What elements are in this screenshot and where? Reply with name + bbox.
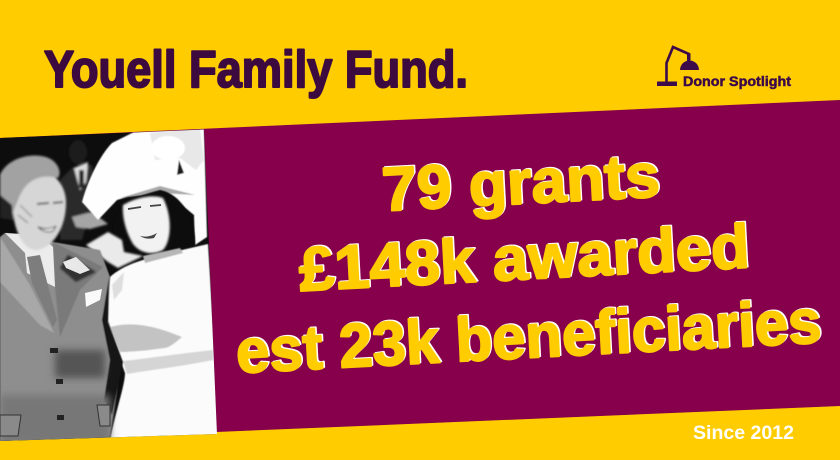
icon: desk lamp	[657, 47, 699, 86]
man's suit	[0, 233, 123, 445]
stat: beneficiaries: est 23k beneficiaries	[236, 286, 824, 386]
logo: donor spotlight	[657, 47, 791, 89]
woman's face	[123, 196, 170, 253]
logo text: Donor Spotlight	[683, 73, 791, 89]
key statistics	[234, 140, 824, 387]
woman's hair	[139, 189, 196, 246]
white hat	[82, 128, 207, 245]
stat: awarded: £148k awarded	[297, 212, 751, 305]
background guest	[60, 140, 108, 240]
man's head	[0, 156, 66, 250]
boutonniere and pocket square	[0, 255, 110, 436]
stat: grants: 79 grants	[382, 140, 663, 224]
bouquet	[86, 232, 143, 268]
stat: beneficiaries: est 23k beneficiaries	[234, 287, 823, 387]
since date: Since 2012	[693, 423, 794, 444]
white dress	[107, 244, 220, 440]
stat: grants: 79 grants	[380, 142, 661, 225]
panel: maroon band	[0, 100, 840, 441]
title: Youell Family Fund.	[44, 41, 468, 99]
stat: awarded: £148k awarded	[299, 211, 753, 304]
photo: wedding couple	[0, 125, 220, 445]
shirt and tie	[5, 233, 55, 287]
